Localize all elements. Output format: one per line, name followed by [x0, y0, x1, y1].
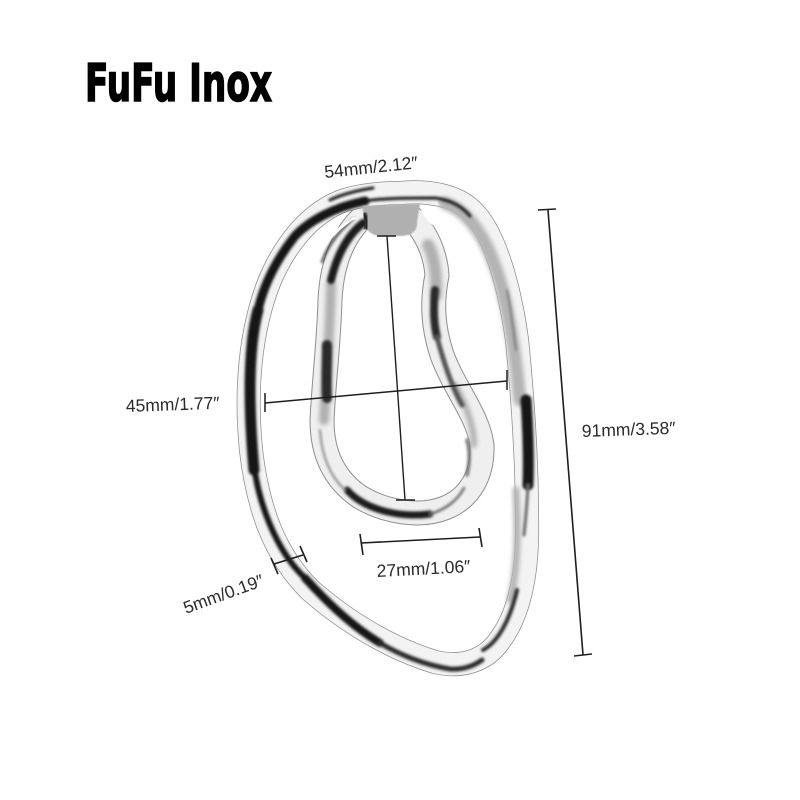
title: FuFu Inox — [85, 54, 272, 114]
top joining plate — [362, 204, 420, 236]
ring highlight — [249, 192, 527, 664]
steel object — [249, 188, 528, 669]
ring reflections — [250, 188, 528, 669]
line: 45mm width — [265, 370, 507, 412]
outer steel ring — [249, 192, 527, 664]
inner loop gray bands — [324, 245, 474, 445]
line: 91mm height — [538, 209, 592, 656]
line: 27mm width — [360, 528, 482, 555]
plate shadow — [364, 214, 367, 228]
inner steel loop — [320, 214, 482, 515]
label: 45mm: 45mm/1.77″ — [125, 393, 220, 416]
label: 54mm: 54mm/2.12″ — [323, 152, 419, 182]
ring gray bands — [445, 203, 520, 600]
right slot — [421, 210, 445, 234]
inner loop reflections — [320, 219, 469, 515]
label: 91mm: 91mm/3.58″ — [581, 418, 676, 441]
left slot — [322, 217, 357, 252]
line: inner length — [377, 236, 415, 500]
line: 5mm thickness — [271, 546, 307, 574]
label: 5mm: 5mm/0.19″ — [181, 570, 266, 618]
dimension lines — [265, 209, 592, 656]
label: 27mm: 27mm/1.06″ — [376, 556, 471, 581]
